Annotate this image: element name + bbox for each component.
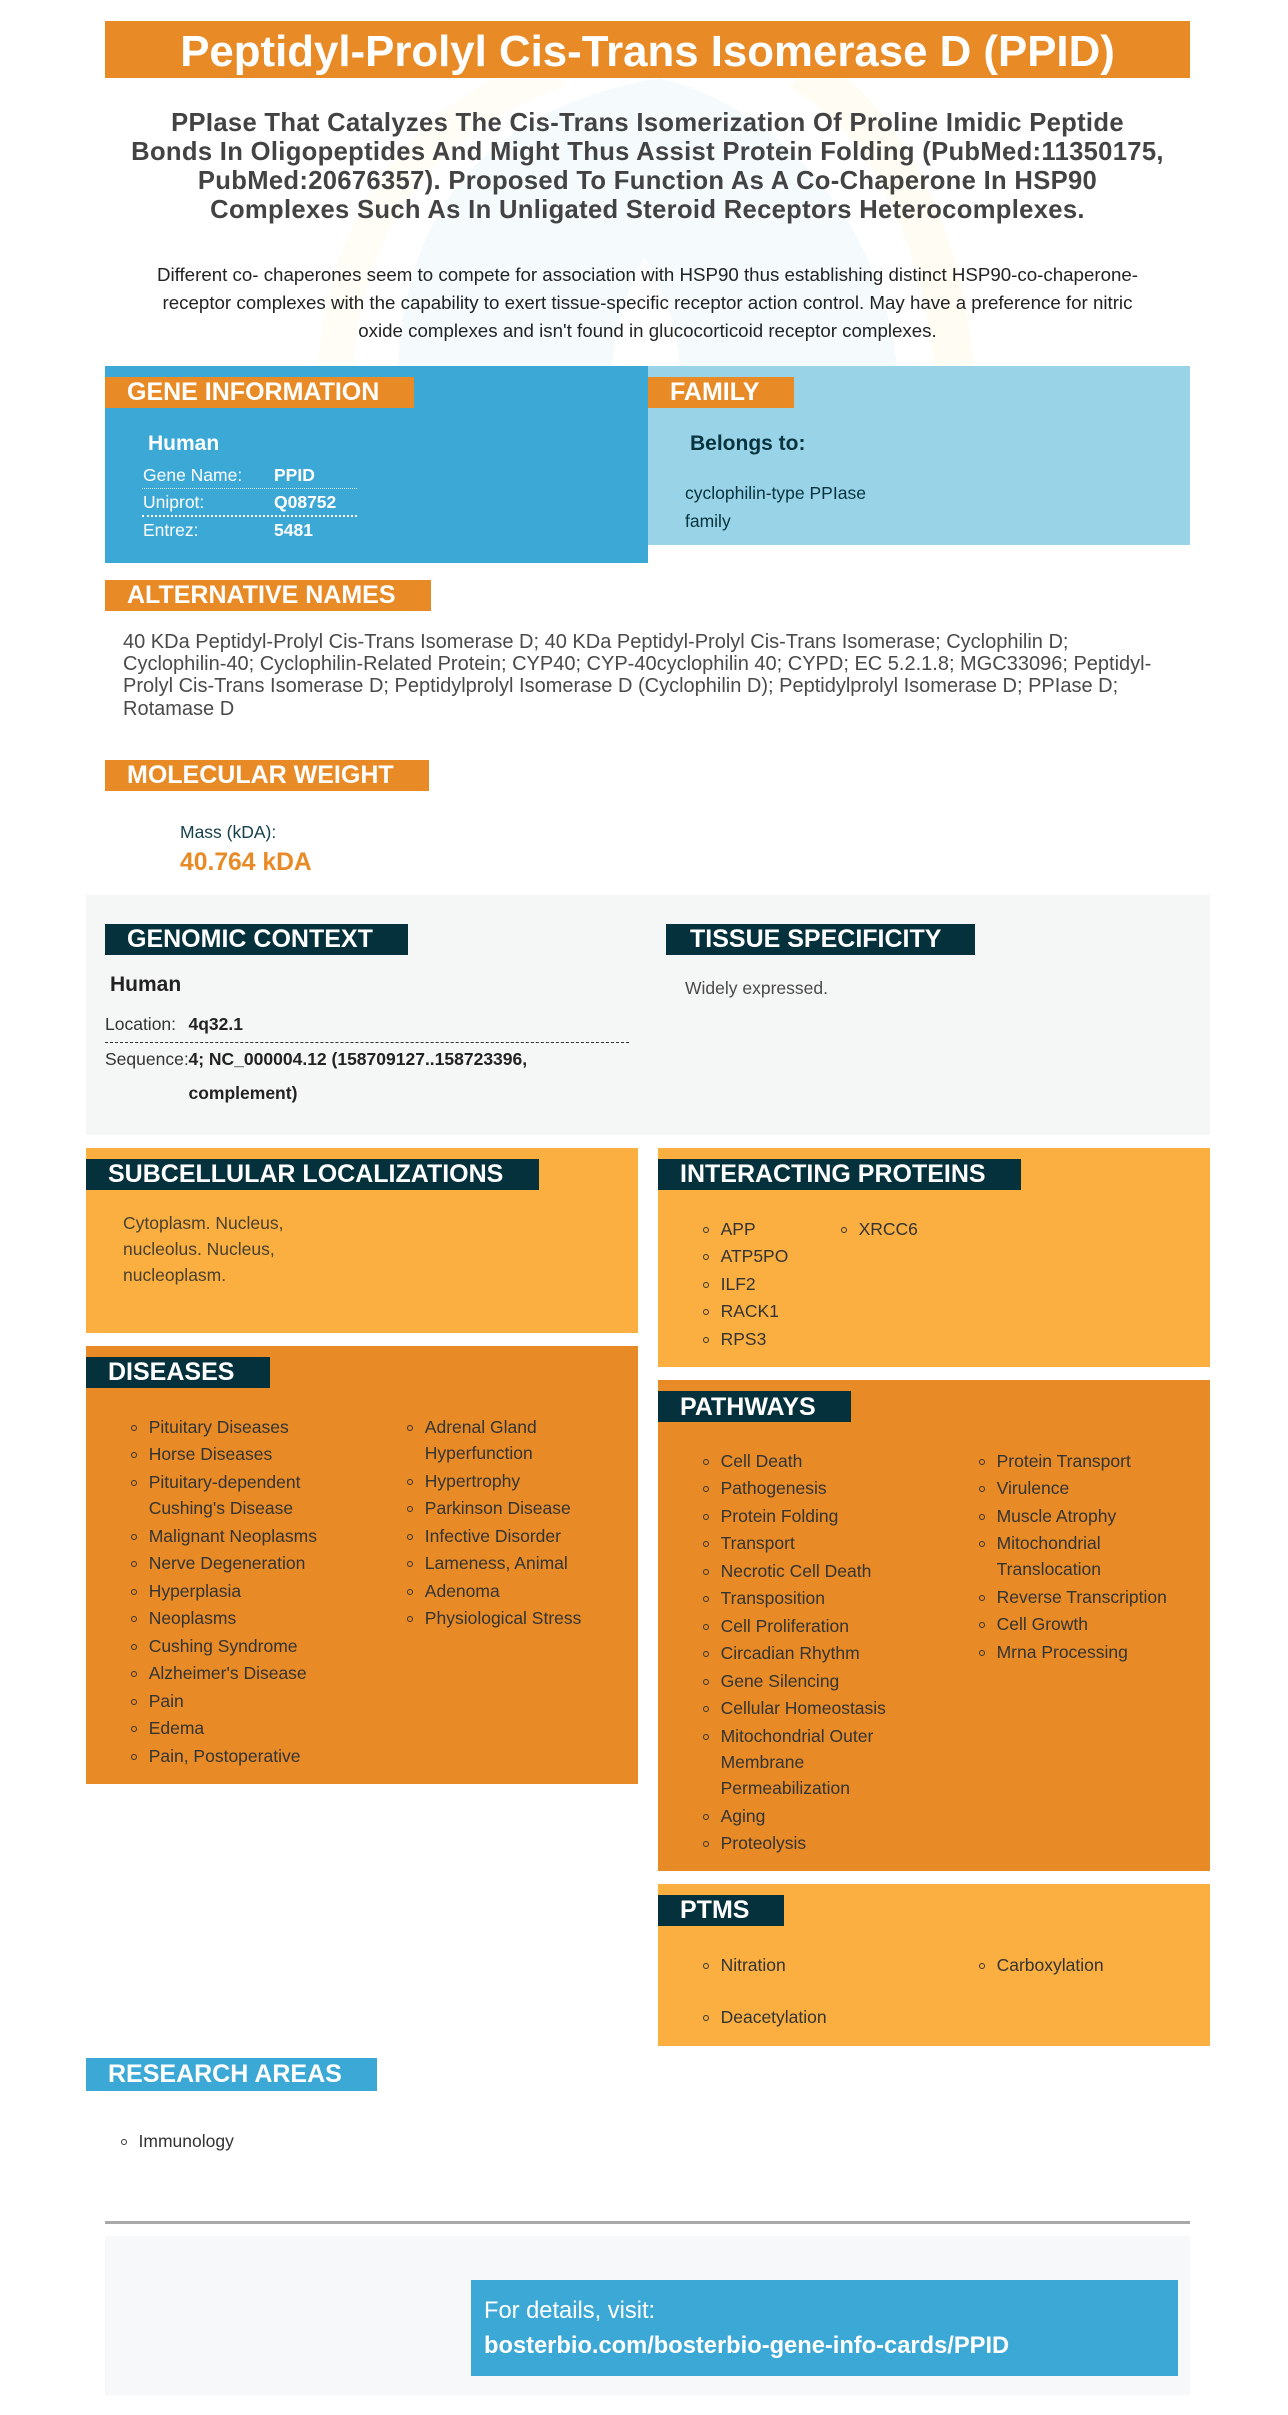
pathway list: Translocation xyxy=(997,1559,1101,1579)
disease list: Pain, Postoperative xyxy=(149,1746,300,1766)
heading: diseases xyxy=(86,1357,270,1388)
panel: diseases xyxy=(86,1346,638,1784)
family name text: family xyxy=(685,511,731,531)
pathway list: Aging xyxy=(721,1806,765,1826)
uniprot row: Uniprot: xyxy=(143,492,204,512)
pathway list: Membrane xyxy=(721,1752,804,1772)
family name text xyxy=(685,483,866,531)
species label: Human xyxy=(148,432,219,455)
background watermark logo xyxy=(318,78,974,366)
disease list: Adrenal Gland xyxy=(425,1417,537,1437)
species label: Human xyxy=(110,973,181,996)
panel: footer xyxy=(105,2236,1190,2395)
disease list: Lameness, Animal xyxy=(425,1553,568,1573)
pathway list: Protein Transport xyxy=(997,1450,1131,1470)
panel: interacting proteins xyxy=(658,1148,1210,1367)
alternative names text: Prolyl Cis-Trans Isomerase D; Peptidylprolyl Isomerase D (Cyclophilin D); Peptidylprolyl Isomerase D; PPIase D; xyxy=(123,675,1118,697)
callout url: bosterbio.com/bosterbio-gene-info-cards/PPID xyxy=(484,2333,1009,2359)
pathway list xyxy=(703,1450,1167,1853)
pathway list: Cell Death xyxy=(721,1450,802,1470)
heading: tissue specificity: TISSUE SPECIFICITY xyxy=(690,925,941,953)
heading: research areas xyxy=(86,2058,377,2091)
pathway list: Mitochondrial xyxy=(997,1533,1101,1553)
panel: genomic context and tissue specificity xyxy=(86,895,1210,1135)
description paragraph xyxy=(157,264,1138,341)
panel: pathways xyxy=(658,1380,1210,1871)
location row xyxy=(105,1014,243,1034)
heading: pathways xyxy=(658,1391,851,1422)
subtitle: protein function summary: Bonds In Oligopeptides And Might Thus Assist Protein Folding (PubMed:11350175, xyxy=(131,138,1164,166)
pathway list: Permeabilization xyxy=(721,1778,850,1798)
pathway list: Muscle Atrophy xyxy=(997,1506,1116,1526)
subtitle: protein function summary xyxy=(131,108,1164,224)
ptm list: Carboxylation xyxy=(997,1955,1104,1975)
localization text: Cytoplasm. Nucleus, xyxy=(123,1213,283,1233)
pathway list: Circadian Rhythm xyxy=(721,1643,860,1663)
sequence row: complement) xyxy=(188,1083,297,1103)
research areas list: Immunology xyxy=(138,2131,234,2151)
pathway list: Transport xyxy=(721,1533,795,1553)
location row: 4q32.1 xyxy=(188,1014,243,1034)
title: Peptidyl-Prolyl Cis-Trans Isomerase D (PPID) xyxy=(180,27,1115,76)
protein list: RACK1 xyxy=(721,1301,779,1321)
protein list: APP xyxy=(721,1219,756,1239)
disease list: Cushing's Disease xyxy=(149,1498,293,1518)
subtitle: protein function summary: PubMed:20676357). Proposed To Function As A Co-Chaperone In HSP90 xyxy=(198,166,1097,194)
tissue specificity text: Widely expressed. xyxy=(685,978,828,998)
description paragraph: receptor complexes with the capability to exert tissue-specific receptor action control. May have a preference for nitric xyxy=(163,292,1132,313)
disease list: Physiological Stress xyxy=(425,1608,581,1628)
heading: ptms xyxy=(658,1895,784,1926)
disease list: Nerve Degeneration xyxy=(149,1553,305,1573)
heading: ptms: PTMS xyxy=(680,1896,749,1924)
pathway list: Cell Growth xyxy=(997,1614,1088,1634)
heading: subcellular localizations: SUBCELLULAR LOCALIZATIONS xyxy=(108,1160,503,1188)
disease list: Hyperfunction xyxy=(425,1443,533,1463)
divider dots xyxy=(142,515,357,517)
protein list: ILF2 xyxy=(721,1274,756,1294)
pathway list: Proteolysis xyxy=(721,1833,806,1853)
panel: subcellular localizations xyxy=(86,1148,638,1333)
disease list: Neoplasms xyxy=(149,1608,236,1628)
subtitle: protein function summary: PPIase That Catalyzes The Cis-Trans Isomerization Of Proline Imidic Peptide xyxy=(171,108,1124,136)
heading: family: FAMILY xyxy=(670,378,759,406)
protein list: ATP5PO xyxy=(721,1246,788,1266)
localization text xyxy=(123,1213,283,1285)
disease list: Parkinson Disease xyxy=(425,1498,571,1518)
pathway list: Transposition xyxy=(721,1588,825,1608)
disease list: Cushing Syndrome xyxy=(149,1636,298,1656)
entrez row: Entrez: xyxy=(143,520,198,540)
ptm list xyxy=(703,1955,1104,2027)
localization text: nucleolus. Nucleus, xyxy=(123,1239,275,1259)
heading: research areas: RESEARCH AREAS xyxy=(108,2060,342,2088)
pathway list: Virulence xyxy=(997,1478,1069,1498)
pathway list: Cellular Homeostasis xyxy=(721,1698,886,1718)
pathway list: Pathogenesis xyxy=(721,1478,827,1498)
panel: gene information xyxy=(105,366,648,563)
heading: interacting proteins: INTERACTING PROTEINS xyxy=(680,1160,986,1188)
uniprot row: Q08752 xyxy=(274,492,336,512)
divider dots xyxy=(142,488,357,489)
protein list xyxy=(703,1219,918,1349)
disease list xyxy=(131,1417,581,1766)
heading: family xyxy=(648,377,794,408)
entrez row xyxy=(143,520,313,540)
disease list: Pain xyxy=(149,1691,184,1711)
alternative names text: Rotamase D xyxy=(123,698,234,720)
location row: Location: xyxy=(105,1014,176,1034)
pathway list: Necrotic Cell Death xyxy=(721,1560,871,1580)
alternative names text: 40 KDa Peptidyl-Prolyl Cis-Trans Isomerase D; 40 KDa Peptidyl-Prolyl Cis-Trans Isomerase; Cyclophilin D; xyxy=(123,631,1068,653)
divider dashes xyxy=(105,1042,629,1043)
pathway list: Mitochondrial Outer xyxy=(721,1726,873,1746)
callout: details link xyxy=(471,2280,1178,2376)
gene name row: Gene Name: xyxy=(143,465,242,485)
mass value: 40.764 kDA xyxy=(180,849,312,876)
sequence row xyxy=(105,1049,527,1103)
panel: ptms xyxy=(658,1884,1210,2046)
pathway list: Cell Proliferation xyxy=(721,1616,849,1636)
protein list: XRCC6 xyxy=(859,1219,918,1239)
gene name row xyxy=(143,465,315,485)
disease list: Pituitary-dependent xyxy=(149,1472,300,1492)
uniprot row xyxy=(143,492,336,512)
panel: family xyxy=(648,366,1190,545)
disease list: Hypertrophy xyxy=(425,1471,520,1491)
family name text: cyclophilin-type PPIase xyxy=(685,483,866,503)
pathway list: Gene Silencing xyxy=(721,1670,839,1690)
disease list: Horse Diseases xyxy=(149,1444,272,1464)
disease list: Hyperplasia xyxy=(149,1581,241,1601)
alternative names text: Cyclophilin-40; Cyclophilin-Related Protein; CYP40; CYP-40cyclophilin 40; CYPD; EC 5.2.1.8; MGC33096; Peptidyl- xyxy=(123,653,1151,675)
disease list: Infective Disorder xyxy=(425,1526,561,1546)
heading: alternative names: ALTERNATIVE NAMES xyxy=(127,581,396,609)
belongs to label: Belongs to: xyxy=(690,432,806,455)
ptm list: Deacetylation xyxy=(721,2007,827,2027)
pathway list: Reverse Transcription xyxy=(997,1587,1167,1607)
localization text: nucleoplasm. xyxy=(123,1265,226,1285)
pathway list: Mrna Processing xyxy=(997,1642,1128,1662)
heading: molecular weight: MOLECULAR WEIGHT xyxy=(127,761,394,789)
protein list: RPS3 xyxy=(721,1329,766,1349)
heading: genomic context: GENOMIC CONTEXT xyxy=(127,925,373,953)
sequence row: Sequence: xyxy=(105,1049,189,1069)
heading: gene information: GENE INFORMATION xyxy=(127,378,379,406)
sequence row: 4; NC_000004.12 (158709127..158723396, xyxy=(188,1049,527,1069)
pathway list: Protein Folding xyxy=(721,1506,838,1526)
disease list: Edema xyxy=(149,1718,204,1738)
description paragraph: Different co- chaperones seem to compete for association with HSP90 thus establishing distinct HSP90-co-chaperone- xyxy=(157,264,1138,285)
callout label: For details, visit: xyxy=(484,2298,655,2324)
disease list: Malignant Neoplasms xyxy=(149,1526,317,1546)
entrez row: 5481 xyxy=(274,520,313,540)
footer rule xyxy=(105,2221,1190,2224)
disease list: Alzheimer's Disease xyxy=(149,1663,307,1683)
heading: diseases: DISEASES xyxy=(108,1358,234,1386)
disease list: Adenoma xyxy=(425,1581,500,1601)
disease list: Pituitary Diseases xyxy=(149,1417,289,1437)
heading: pathways: PATHWAYS xyxy=(680,1393,816,1421)
ptm list: Nitration xyxy=(721,1955,786,1975)
alternative names text xyxy=(123,631,1151,720)
description paragraph: oxide complexes and isn't found in glucocorticoid receptor complexes. xyxy=(358,320,937,341)
subtitle: protein function summary: Complexes Such As In Unligated Steroid Receptors Heterocomplexes. xyxy=(210,196,1085,224)
mass label: Mass (kDA): xyxy=(180,822,276,842)
gene name row: PPID xyxy=(274,465,315,485)
